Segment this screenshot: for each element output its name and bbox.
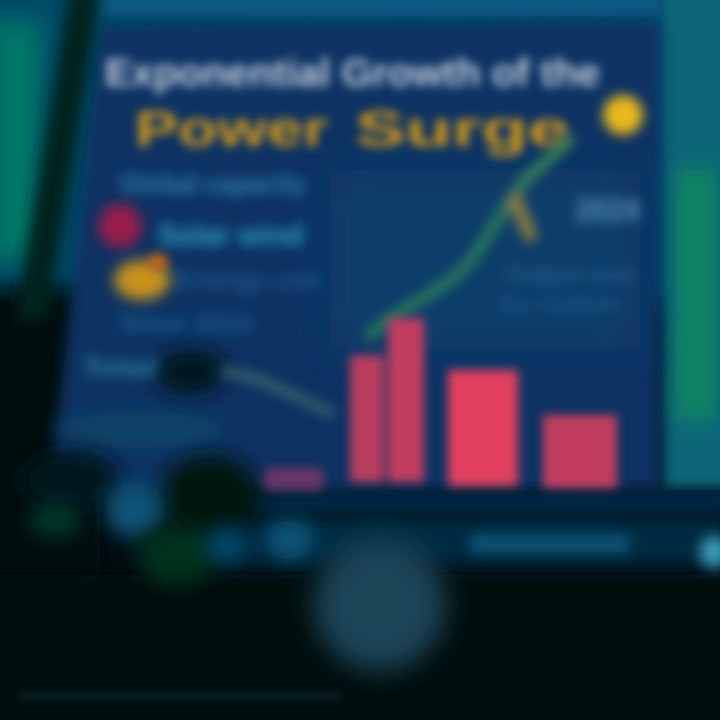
- bar 2: [388, 318, 424, 482]
- legend text: left: [82, 168, 320, 382]
- bar 5 small: [265, 468, 323, 490]
- tree silhouette left: [15, 0, 340, 700]
- icon: pie chart: [98, 204, 170, 300]
- text block: right note: by region: [500, 293, 620, 315]
- panel: billboard: [50, 0, 720, 568]
- text block: right note: Output rose: [505, 262, 635, 287]
- growth line arrow: [225, 140, 570, 412]
- icon: gold sun: [603, 95, 643, 135]
- text block: right note: [500, 192, 640, 315]
- legend text: left: Global capacity: [120, 168, 305, 199]
- title line 2: Surge: [355, 101, 570, 157]
- bar 1: [350, 355, 384, 482]
- title: [105, 52, 600, 157]
- legend text: left: Total: [82, 352, 157, 382]
- bar 4: [543, 415, 617, 488]
- bar chart: [265, 318, 617, 490]
- legend text: left: Since 2010: [118, 308, 253, 338]
- legend text: left: Energy use: [175, 267, 320, 294]
- text block: right note: 2024: [575, 192, 640, 228]
- bar 3: [448, 370, 518, 486]
- title line 1: Exponential Growth of the: [105, 52, 600, 95]
- title line 2: Power: [135, 101, 328, 157]
- legend text: left: Solar wind: [158, 219, 303, 252]
- wheel: [314, 539, 446, 671]
